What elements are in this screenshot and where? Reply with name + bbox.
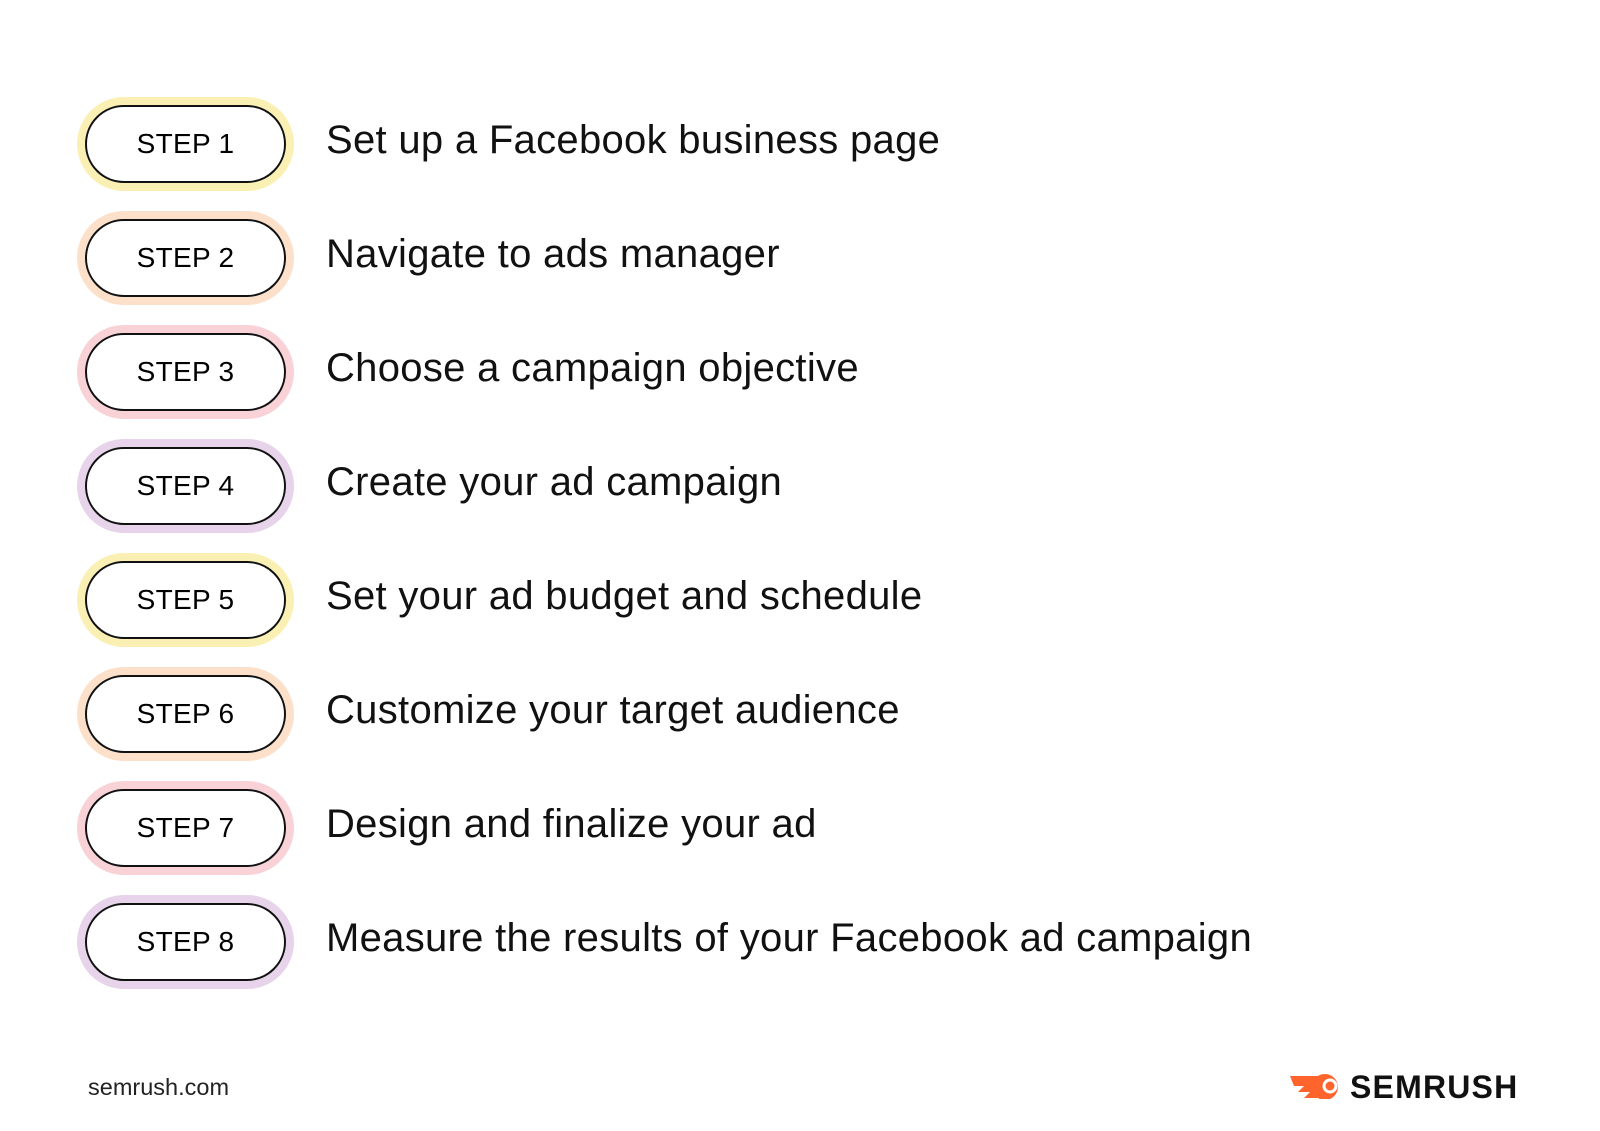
step 3: Choose a campaign objective (326, 346, 859, 390)
step 1: STEP 1 (137, 128, 234, 159)
step 6: STEP 6 (137, 698, 234, 729)
step 7 (77, 781, 817, 875)
step 6: Customize your target audience (326, 688, 900, 732)
step 1: Set up a Facebook business page (326, 118, 940, 162)
step 2: STEP 2 (137, 242, 234, 273)
footer url: semrush.com (88, 1074, 229, 1100)
step 4: Create your ad campaign (326, 460, 782, 504)
step 2 (77, 211, 780, 305)
icon: semrush flame (1290, 1074, 1338, 1099)
step 5: Set your ad budget and schedule (326, 574, 922, 618)
step 2: Navigate to ads manager (326, 232, 780, 276)
step 8: STEP 8 (137, 926, 234, 957)
step 7: STEP 7 (137, 812, 234, 843)
step 8 (77, 895, 1252, 989)
step 4: STEP 4 (137, 470, 234, 501)
logo (1290, 1069, 1518, 1105)
step 7: Design and finalize your ad (326, 802, 817, 846)
step 4 (77, 439, 782, 533)
step 5 (77, 553, 922, 647)
step 6 (77, 667, 900, 761)
step 1 (77, 97, 940, 191)
step 5: STEP 5 (137, 584, 234, 615)
step 3 (77, 325, 859, 419)
step 3: STEP 3 (137, 356, 234, 387)
step 8: Measure the results of your Facebook ad campaign (326, 916, 1252, 960)
logo text: SEMRUSH (1350, 1069, 1518, 1105)
